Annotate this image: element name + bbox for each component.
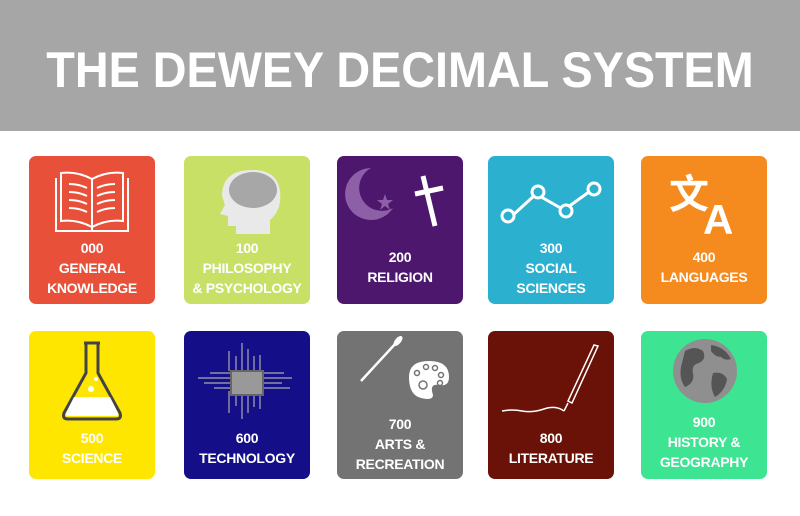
tile: 200 religion [337, 156, 463, 304]
title: THE DEWEY DECIMAL SYSTEM [46, 42, 754, 98]
label: SCIENCES [516, 280, 586, 296]
label: 700 [389, 416, 411, 432]
tile: 100 philosophy [184, 156, 310, 304]
label: ARTS & [375, 436, 425, 452]
tile: 500 science [29, 331, 155, 479]
label [661, 249, 748, 285]
label [516, 240, 586, 296]
tile: 000 general knowledge [29, 156, 155, 304]
label: HISTORY & [668, 434, 740, 450]
tile: 800 literature [488, 331, 614, 479]
label: 500 [81, 430, 103, 446]
tile: 300 social sciences [488, 156, 614, 304]
label: SOCIAL [525, 260, 577, 276]
tile: 700 arts [337, 331, 463, 479]
label: 100 [236, 240, 258, 256]
label: & PSYCHOLOGY [192, 280, 302, 296]
label: TECHNOLOGY [199, 450, 295, 466]
icon: head [220, 170, 280, 234]
label [192, 240, 302, 296]
label: SCIENCE [62, 450, 122, 466]
label [509, 430, 594, 466]
label: 300 [540, 240, 562, 256]
tile: 600 technology [184, 331, 310, 479]
icon: brush and palette [360, 336, 449, 399]
icon: flask [62, 342, 122, 420]
label: 600 [236, 430, 258, 446]
label: RECREATION [356, 456, 444, 472]
label [199, 430, 295, 466]
label: LITERATURE [509, 450, 593, 466]
label: 800 [540, 430, 562, 446]
label: 400 [693, 249, 715, 265]
icon: translate: 文 [669, 162, 709, 220]
label [47, 240, 137, 296]
label [62, 430, 122, 466]
icon: translate: A [703, 196, 733, 243]
icon: chip [198, 343, 292, 419]
icon: crescent and cross [345, 168, 444, 227]
tile: 400 languages [641, 156, 767, 304]
label [660, 414, 748, 470]
header band [0, 0, 800, 131]
icon: quill pen [502, 344, 599, 412]
label: 200 [389, 249, 411, 265]
label [356, 416, 444, 472]
icon: open book [55, 172, 129, 232]
label: GEOGRAPHY [660, 454, 748, 470]
label: 000 [81, 240, 103, 256]
icon: globe [673, 339, 737, 403]
label: RELIGION [367, 269, 433, 285]
icon: translate [669, 162, 733, 243]
label: 900 [693, 414, 715, 430]
label: GENERAL [59, 260, 125, 276]
label: LANGUAGES [661, 269, 747, 285]
label: PHILOSOPHY [203, 260, 291, 276]
tile: 900 history and geography [641, 331, 767, 479]
icon: line graph [500, 182, 602, 224]
label [367, 249, 433, 285]
label: KNOWLEDGE [47, 280, 137, 296]
